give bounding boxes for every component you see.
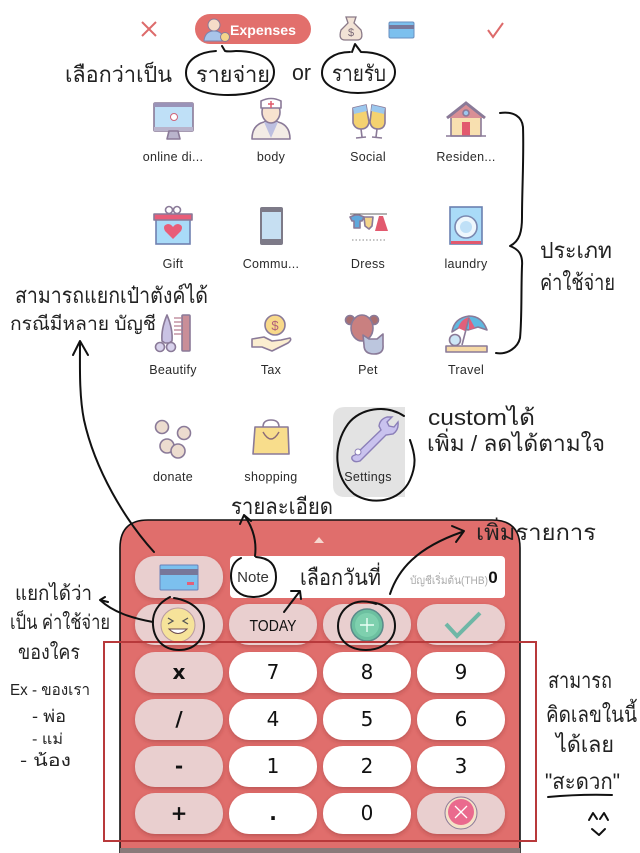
icon: wrench [352,417,398,462]
icon: check [488,23,503,37]
bracket: category group [496,113,523,353]
key labels: 3 [455,754,467,778]
note: details: รายละเอียด [231,494,333,519]
note: add item: เพิ่มรายการ [476,517,596,545]
icon: emoji [161,608,195,642]
note: custom [427,405,605,456]
icon: beautify [156,315,190,352]
label: body: body [257,150,286,164]
row 2 buttons [135,604,505,645]
label: online di...: online di... [143,150,203,164]
icon: card [389,22,414,38]
icon: tax: $ [271,318,279,333]
icon: residence [446,103,486,136]
circled: expense: รายจ่าย [196,62,270,87]
circled: expense [186,46,274,95]
icon: add [351,609,383,641]
note: separate wallets [10,283,208,335]
circle: add [338,601,395,650]
note: expense types [540,238,615,295]
icon: laundry [450,207,482,244]
label: Tax: Tax [261,363,282,377]
arrow: add item [390,526,464,594]
label: Settings: Settings [344,470,392,484]
note: whose expense: เป็น ค่าใช้จ่าย [10,609,110,634]
category grid [143,98,496,497]
note: keypad: สามารถ [548,668,612,693]
label: Beautify: Beautify [149,363,197,377]
icon: body [252,98,290,139]
note: whose expense: แยกได้ว่า [15,582,92,605]
button: account card [135,556,223,598]
note: keypad [545,668,637,835]
circled: income [322,44,395,93]
circle: settings [337,409,415,501]
note: whose expense: - พ่อ [32,707,66,726]
icon: confirm [446,613,480,636]
icon: shopping [253,420,289,454]
handle [314,537,324,543]
key labels: x [173,660,186,684]
arrow: wallet [73,341,154,552]
note: whose expense: - แม่ [32,731,63,748]
note: separate wallets: สามารถแยกเป๋าตังค์ได้ [15,283,208,308]
label: Gift: Gift [163,257,184,271]
label: Travel: Travel [448,363,484,377]
key labels: . [269,801,277,825]
text: balance: 0 [488,568,498,587]
icon: money bag [340,17,362,40]
text: or: or [292,60,311,85]
text: Note: Note [237,569,269,586]
icon: close [142,22,156,36]
icon: online digital [154,103,193,139]
key labels: 1 [267,754,279,778]
key labels [171,660,467,825]
label: Residen...: Residen... [436,150,496,164]
note input [230,556,505,598]
arrow: emoji [100,597,153,622]
settings tile [333,407,405,497]
note: keypad: "สะดวก" [545,769,620,794]
icon: travel [446,316,487,352]
key labels: 8 [361,660,373,684]
circle: note [231,557,276,597]
key labels: + [171,801,187,825]
label: shopping: shopping [244,470,298,484]
key labels: 6 [455,707,467,731]
key labels: 2 [361,754,373,778]
icon: tax [252,315,291,351]
icon: pet [346,315,383,354]
key labels: - [175,754,183,778]
key labels: 0 [361,801,373,825]
text: balance label: บัญชีเริ่มต้น(THB) [410,572,488,587]
note: separate wallets: กรณีมีหลาย บัญชี [10,313,156,335]
circle: emoji [153,597,204,650]
keypad [135,652,505,834]
icon: delete [445,797,477,829]
label: donate: donate [153,470,193,484]
label: Dress: Dress [351,257,385,271]
circled: income: รายรับ [332,61,386,86]
icon: gift [154,206,192,244]
key labels: 5 [361,707,373,731]
key labels: 4 [267,707,279,731]
highlight: keypad frame [104,642,536,841]
heading: choose expense or income: เลือกว่าเป็น [65,60,172,87]
note: whose expense: ของใคร [18,641,80,664]
heading: choose expense or income [65,44,395,95]
text: choose date: เลือกวันที่ [300,562,381,590]
note: expense types: ค่าใช้จ่าย [540,270,615,295]
key labels: 9 [455,660,467,684]
key labels: / [175,707,183,731]
icon: social [353,105,385,138]
arrow: today [284,591,301,612]
icon: donate [156,420,190,458]
icon: money bag: $ [348,27,354,39]
label: Commu...: Commu... [243,257,299,271]
calculator panel [120,520,520,853]
tab: Expenses pill [195,14,311,44]
button text: TODAY: TODAY [250,618,297,635]
label: laundry: laundry [444,257,488,271]
label: Social: Social [350,150,386,164]
arrow: note [240,515,255,556]
note: custom: customได้ [428,405,535,430]
note: whose expense: - น้อง [20,751,71,770]
icon: dress [350,214,388,240]
tab: Expenses pill: Expenses [230,22,296,38]
key labels: 7 [267,660,279,684]
label: Pet: Pet [358,363,378,377]
icon: communication [260,207,283,245]
note: expense types: ประเภท [540,238,612,263]
note: whose expense: Ex - ของเรา [10,682,90,699]
note: whose expense [10,582,110,770]
note: keypad: ได้เลย [554,732,614,757]
note: custom: เพิ่ม / ลดได้ตามใจ [427,428,605,456]
